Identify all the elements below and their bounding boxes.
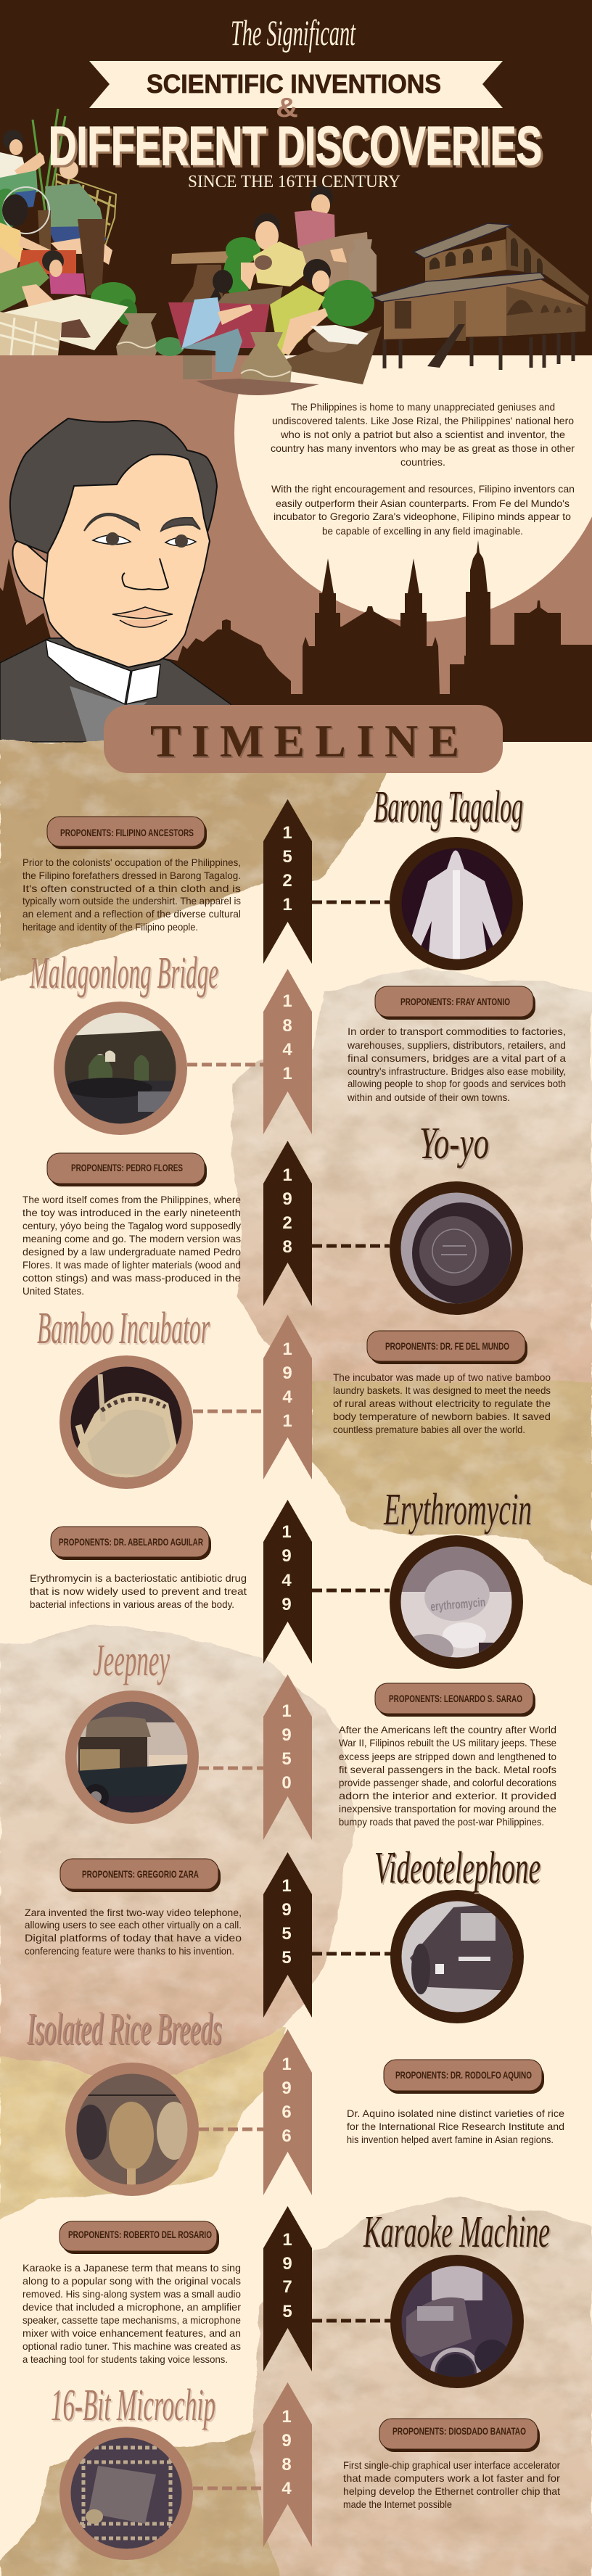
eyebrows — [84, 513, 200, 531]
year ribbon: 8 — [282, 1237, 292, 1257]
year ribbon: 9 — [281, 1900, 292, 1920]
1928 entry — [22, 1119, 523, 1315]
proponent pill — [379, 2419, 540, 2452]
description: United States. — [22, 1285, 84, 1297]
jacket — [0, 638, 231, 742]
description: for the International Rice Research Institute and — [347, 2121, 564, 2132]
proponent pill: PROPONENTS: DR. RODOLFO AQUINO — [395, 2069, 532, 2081]
description: final consumers, bridges are a vital part of a — [348, 1052, 566, 1064]
year ribbon: 1 — [282, 895, 292, 915]
connector — [312, 2319, 391, 2322]
year ribbon: 8 — [282, 1016, 292, 1036]
1521 entry — [22, 783, 523, 970]
proponent pill: PROPONENTS: GREGORIO ZARA — [82, 1868, 199, 1880]
year ribbon: 5 — [282, 847, 292, 867]
year ribbon: 9 — [281, 1546, 292, 1566]
year ribbon: 4 — [281, 2479, 292, 2498]
description — [30, 1572, 247, 1610]
description: The word itself comes from the Philippines, where — [22, 1194, 241, 1205]
proponent pill: PROPONENTS: DIOSDADO BANATAO — [392, 2425, 526, 2437]
1949 entry — [30, 1485, 532, 1669]
cream strip under house — [348, 355, 592, 406]
year ribbon: 6 — [281, 2126, 292, 2146]
1984 entry — [51, 2381, 560, 2560]
title: Malagonlong Bridge: Malagonlong Bridge — [29, 949, 218, 998]
intro text: easily outperform their Asian counterparts. From Fe del Mundo's — [276, 498, 570, 509]
intro text: The Philippines is home to many unappreciated geniuses and — [291, 401, 555, 413]
year ribbon — [263, 1500, 312, 1664]
paper: upper right — [231, 967, 592, 1381]
description: body temperature of newborn babies. It saved — [333, 1411, 551, 1422]
1950 entry — [65, 1636, 556, 1840]
description: device that included a microphone, an amplifier — [22, 2301, 241, 2313]
tan hero band — [0, 355, 592, 742]
intro text: With the right encouragement and resources, Filipino inventors can — [271, 483, 575, 495]
year ribbon: 1 — [281, 1701, 292, 1721]
description: countless premature babies all over the world. — [333, 1424, 525, 1435]
description: inexpensive transportation for moving around the — [339, 1803, 556, 1815]
connector — [312, 1244, 390, 1247]
collar — [46, 640, 160, 704]
description — [343, 2459, 560, 2510]
illustration: clay pot left — [116, 313, 158, 355]
description: After the Americans left the country after World — [339, 1724, 556, 1735]
description: along to a popular song with the original vocals — [22, 2275, 241, 2287]
year ribbon: 9 — [282, 1189, 292, 1209]
year ribbon: 8 — [281, 2455, 292, 2474]
description: designed by a law undergraduate named Pedro — [22, 1246, 241, 1258]
description: his invention helped avert famine in Asian regions. — [347, 2134, 554, 2145]
title: 16-Bit Microchip: 16-Bit Microchip — [51, 2381, 215, 2430]
proponent pill: PROPONENTS: ROBERTO DEL ROSARIO — [68, 2229, 212, 2240]
1941 entry — [37, 1304, 551, 1489]
title: Isolated Rice Breeds: Isolated Rice Breeds — [26, 2005, 221, 2054]
photo: yo-yo — [390, 1181, 523, 1315]
1975 entry — [22, 2206, 550, 2396]
title: Jeepney: Jeepney — [93, 1636, 170, 1685]
description: The incubator was made up of two native bamboo — [333, 1371, 551, 1383]
photo: bridge — [54, 1002, 187, 1135]
description: bumpy roads that paved the post-war Philippines. — [339, 1816, 544, 1828]
description — [347, 1025, 566, 1103]
year ribbon: 7 — [282, 2277, 292, 2297]
description: allowing people to shop for goods and services both — [348, 1078, 566, 1089]
year ribbon: 5 — [281, 1948, 292, 1968]
description: laundry baskets. It was designed to meet the needs — [333, 1384, 551, 1396]
year ribbon — [263, 1852, 312, 2018]
year ribbon: 5 — [281, 1924, 292, 1944]
description: a teaching tool for students taking voice lessons. — [22, 2353, 228, 2365]
photo: karaoke machine — [390, 2255, 524, 2396]
face — [44, 455, 210, 667]
year ribbon: 5 — [281, 1749, 292, 1769]
photo: videotelephone — [390, 1890, 524, 2023]
paper: top left — [0, 742, 385, 981]
connector — [193, 2486, 263, 2490]
description: cotton stings) and was mass-produced in the — [22, 1272, 241, 1284]
description: the Filipino forefathers dressed in Barong Tagalog. — [22, 870, 241, 881]
description: century, yóyo being the Tagalog word supposedly — [22, 1220, 241, 1231]
year ribbon — [263, 969, 312, 1134]
description — [22, 856, 241, 933]
year ribbon: 6 — [281, 2102, 292, 2122]
description: In order to transport commodities to factories, — [348, 1025, 566, 1037]
description: Flores. It was made of lighter materials (wood and — [22, 1259, 241, 1271]
description: that is now widely used to prevent and treat — [30, 1585, 247, 1597]
intro text: incubator to Gregorio Zara's videophone, Filipino minds appear to — [274, 511, 571, 522]
proponent pill — [367, 1331, 527, 1364]
subtitle: SINCE THE 16TH CENTURY — [188, 173, 400, 191]
heading pill: Timeline — [104, 705, 503, 773]
illustration: bahay na bato house — [372, 223, 589, 370]
ear — [13, 540, 51, 600]
description: an element and a reflection of the diverse cultural — [22, 908, 241, 920]
description: Erythromycin is a bacteriostatic antibiotic drug — [30, 1572, 247, 1584]
proponent pill — [51, 1527, 211, 1560]
description — [25, 1907, 242, 1957]
year ribbon: 4 — [282, 1387, 292, 1407]
description: War II, Filipinos rebuilt the US military jeeps. These — [339, 1737, 556, 1749]
description: provide passenger shade, and colorful decorations — [339, 1777, 556, 1788]
photo: jeepney — [65, 1690, 199, 1824]
description: Karaoke is a Japanese term that means to sing — [22, 2262, 241, 2274]
illustration: clay pot center — [241, 332, 292, 393]
description: within and outside of their own towns. — [347, 1091, 510, 1103]
connector — [187, 1063, 263, 1066]
paper: bottom left — [0, 2427, 283, 2576]
description: Digital platforms of today that have a video — [25, 1932, 242, 1944]
connector — [312, 1952, 391, 1955]
title: Yo-yo: Yo-yo — [419, 1119, 489, 1168]
proponent pill: PROPONENTS: FILIPINO ANCESTORS — [60, 827, 194, 838]
table shadow — [196, 379, 319, 395]
title ribbon — [89, 61, 503, 108]
cream intro circle — [234, 244, 592, 622]
description: conferencing feature were thanks to his invention. — [25, 1945, 234, 1957]
description: bacterial infections in various areas of the body. — [30, 1598, 234, 1610]
description: Dr. Aquino isolated nine distinct varieties of rice — [347, 2108, 564, 2119]
description — [22, 2262, 241, 2365]
proponent pill — [384, 2060, 544, 2094]
year ribbon — [263, 1675, 312, 1840]
description: Prior to the colonists' occupation of the Philippines, — [22, 856, 241, 868]
illustration: left artisans — [0, 109, 137, 355]
proponent pill — [60, 1859, 221, 1892]
proponent pill: PROPONENTS: LEONARDO S. SARAO — [389, 1693, 522, 1704]
nose — [122, 558, 168, 590]
year ribbon — [263, 2206, 312, 2371]
year ribbon: 1 — [282, 823, 292, 843]
description: made the Internet possible — [343, 2498, 452, 2510]
intro text: be capable of excelling in any field imaginable. — [322, 525, 523, 537]
year ribbon: 4 — [281, 1571, 292, 1590]
year ribbon: 4 — [282, 1040, 292, 1060]
description — [347, 2108, 564, 2145]
year ribbon: 9 — [281, 1725, 292, 1745]
paper: left middle — [0, 1623, 355, 2074]
description — [22, 1194, 241, 1297]
paper: rice section — [0, 2028, 287, 2221]
description: heritage and identity of the Filipino people. — [22, 921, 198, 933]
proponent pill — [59, 2221, 219, 2254]
proponent pill — [375, 986, 535, 1020]
paper: bottom right — [250, 2196, 592, 2576]
year ribbon — [263, 1141, 312, 1306]
photo: bamboo incubator — [59, 1355, 193, 1489]
description: that made computers work a lot faster and for — [343, 2472, 560, 2484]
proponent pill — [47, 1153, 207, 1186]
year ribbon: 2 — [282, 871, 292, 891]
intro text: who is not only a patriot but also a scientist and inventor, the — [280, 429, 565, 440]
title ribbon: SCIENTIFIC INVENTIONS — [147, 69, 441, 99]
description: mixer with voice enhancement features, and an — [22, 2327, 241, 2339]
description: allowing users to see each other virtually on a call. — [25, 1919, 242, 1931]
photo: erythromycin — [390, 1535, 523, 1669]
intro text — [271, 401, 575, 537]
year ribbon: 5 — [282, 2302, 292, 2321]
proponent pill — [375, 1683, 535, 1717]
hair — [10, 418, 217, 558]
illustration: small plant — [155, 337, 184, 356]
1841 entry — [29, 949, 566, 1135]
year ribbon: 9 — [281, 1595, 292, 1614]
year ribbon: 1 — [282, 1339, 292, 1359]
year ribbon — [263, 1315, 312, 1479]
photo: microchip — [59, 2427, 193, 2560]
year ribbon — [263, 2382, 312, 2547]
description — [333, 1371, 551, 1435]
description: optional radio tuner. This machine was created as — [22, 2340, 241, 2352]
connector — [199, 2128, 263, 2131]
connector — [312, 1588, 390, 1593]
title: Bamboo Incubator: Bamboo Incubator — [37, 1304, 210, 1353]
proponent pill — [47, 817, 207, 849]
year ribbon: 1 — [281, 1522, 292, 1542]
year ribbon: 2 — [282, 1213, 292, 1233]
description: country's infrastructure. Bridges also ease mobility, — [348, 1065, 566, 1077]
photo: erythromycin: erythromycin — [430, 1595, 486, 1614]
photo: rice breeds — [65, 2063, 199, 2196]
church skyline silhouette — [0, 540, 592, 742]
photo: barong — [390, 837, 523, 970]
description: adorn the interior and exterior. It provided — [339, 1790, 556, 1801]
year ribbon: 1 — [282, 2230, 292, 2250]
year ribbon: 9 — [282, 2254, 292, 2274]
proponent pill: PROPONENTS: DR. FE DEL MUNDO — [385, 1340, 509, 1352]
dark header background — [0, 0, 592, 355]
1955 entry — [25, 1844, 540, 2023]
description: the toy was introduced in the early nineteenth — [22, 1207, 241, 1218]
connector — [199, 1767, 263, 1770]
heading pill: Timeline: TIMELINE — [150, 715, 459, 767]
year ribbon: 1 — [281, 2055, 292, 2074]
description: speaker, cassette tape mechanisms, a microphone — [22, 2314, 241, 2326]
shirt — [70, 686, 147, 742]
illustration: center artisans — [168, 186, 382, 384]
year ribbon: 1 — [282, 1165, 292, 1185]
proponent pill: PROPONENTS: DR. ABELARDO AGUILAR — [59, 1536, 203, 1548]
description: helping develop the Ethernet controller chip that — [343, 2485, 560, 2497]
intro text: country has many inventors who may be as great as those in other — [271, 442, 575, 454]
year ribbon: 0 — [281, 1773, 292, 1793]
year ribbon: 1 — [282, 991, 292, 1011]
description: removed. His sing-along system was a small audio — [22, 2288, 241, 2300]
proponent pill: PROPONENTS: FRAY ANTONIO — [400, 996, 510, 1007]
description: First single-chip graphical user interface accelerator — [343, 2459, 560, 2471]
year ribbon: 9 — [281, 2078, 292, 2098]
paper: middle right — [312, 1381, 592, 1584]
year ribbon: 1 — [282, 1064, 292, 1083]
description: warehouses, suppliers, distributors, retailers, and — [347, 1039, 566, 1051]
year ribbon: 1 — [282, 1411, 292, 1431]
description: It's often constructed of a thin cloth and is — [22, 883, 241, 894]
description: typically worn outside the undershirt. The apparel is — [22, 895, 241, 907]
connector — [193, 1410, 263, 1413]
year ribbon: 1 — [281, 2407, 292, 2427]
description: fit several passengers in the back. Metal roofs — [339, 1764, 556, 1775]
year ribbon — [263, 2029, 312, 2195]
description: Zara invented the first two-way video telephone, — [25, 1907, 242, 1918]
eyes — [93, 535, 196, 546]
mouth — [112, 607, 173, 627]
intro text: undiscovered talents. Like Jose Rizal, the Philippines' national hero — [272, 415, 574, 426]
connector — [312, 901, 390, 904]
title: The Significant: The Significant — [231, 12, 356, 53]
year ribbon: 9 — [282, 1363, 292, 1383]
intro text: countries. — [400, 456, 445, 468]
description — [339, 1724, 556, 1828]
description: excess jeeps are stripped down and lengthened to — [339, 1751, 556, 1762]
proponent pill: PROPONENTS: PEDRO FLORES — [71, 1162, 183, 1173]
1966 entry — [26, 2005, 564, 2196]
year ribbon: 9 — [281, 2431, 292, 2451]
description: of rural areas without electricity to regulate the — [333, 1398, 551, 1409]
description: meaning come and go. The modern version was — [22, 1233, 241, 1244]
year ribbon — [263, 799, 312, 964]
ampersand: & — [276, 93, 298, 123]
year ribbon: 1 — [281, 1876, 292, 1896]
portrait: Jose Rizal — [0, 418, 231, 742]
